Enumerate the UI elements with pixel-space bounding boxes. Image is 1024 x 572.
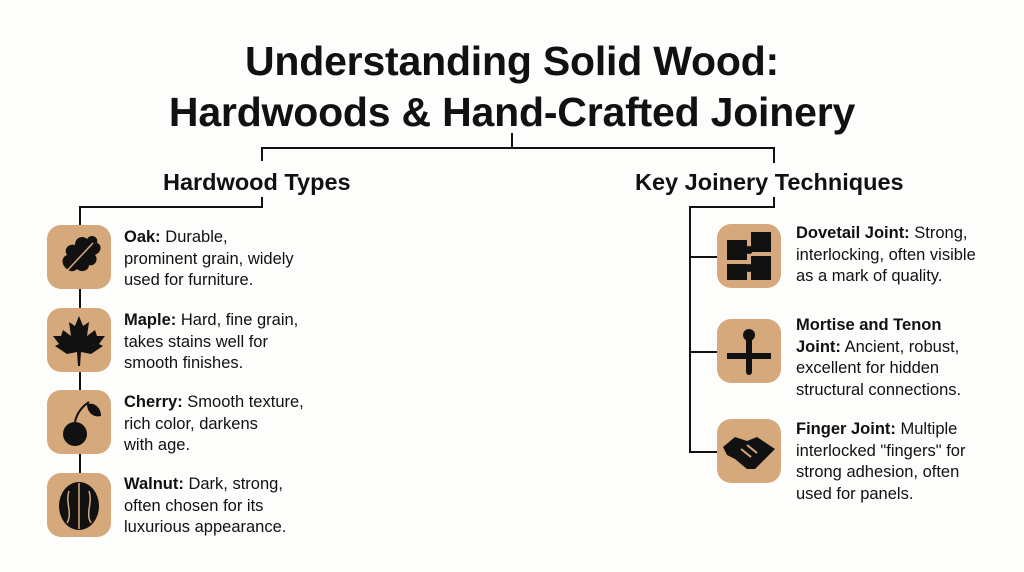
- panel: hardwood types: [47, 225, 304, 537]
- panel: joinery techniques: [717, 224, 976, 502]
- text: walnut: Walnut: Dark, strong,: [124, 475, 283, 493]
- text: oak: [124, 228, 294, 289]
- text: finger joint: strong adhesion, often: [796, 463, 959, 481]
- text: mortise and tenon: [796, 316, 961, 398]
- text: oak: prominent grain, widely: [124, 250, 294, 268]
- text: cherry: with age.: [124, 436, 190, 454]
- text: oak: used for furniture.: [124, 271, 253, 289]
- text: finger joint: Finger Joint: Multiple: [796, 420, 957, 438]
- text: mortise and tenon: structural connections.: [796, 380, 961, 398]
- text: walnut: often chosen for its: [124, 496, 263, 514]
- text: finger joint: [796, 420, 966, 502]
- text: maple: smooth finishes.: [124, 354, 243, 372]
- text: dovetail: [796, 224, 976, 285]
- title: [169, 38, 855, 135]
- icon: handshake: [717, 419, 781, 483]
- text: maple: [124, 311, 298, 372]
- text: mortise and tenon: Mortise and Tenon: [796, 316, 941, 334]
- text: cherry: [124, 393, 304, 454]
- icon: mortise and tenon: [717, 319, 781, 383]
- text: maple: takes stains well for: [124, 332, 268, 350]
- icon: puzzle: [717, 224, 781, 288]
- text: maple: Maple: Hard, fine grain,: [124, 311, 298, 329]
- title: Hardwoods & Hand-Crafted Joinery: [169, 89, 855, 135]
- text: dovetail: as a mark of quality.: [796, 267, 942, 285]
- text: oak: Oak: Durable,: [124, 228, 228, 246]
- text: mortise and tenon: excellent for hidden: [796, 359, 939, 377]
- icon: maple leaf: [47, 308, 111, 372]
- text: dovetail: Dovetail Joint: Strong,: [796, 224, 967, 242]
- text: finger joint: used for panels.: [796, 484, 913, 502]
- text: mortise and tenon: Joint: Ancient, robust,: [796, 338, 959, 356]
- title: Understanding Solid Wood:: [245, 38, 779, 84]
- text: walnut: luxurious appearance.: [124, 518, 286, 536]
- icon: cherry: [47, 390, 111, 454]
- text: cherry: Cherry: Smooth texture,: [124, 393, 304, 411]
- icon: walnut: [47, 473, 111, 537]
- text: cherry: rich color, darkens: [124, 414, 258, 432]
- heading: hardwood types: Hardwood Types: [163, 169, 351, 195]
- text: dovetail: interlocking, often visible: [796, 246, 976, 264]
- text: finger joint: interlocked "fingers" for: [796, 442, 965, 460]
- icon: oak leaf: [47, 225, 111, 289]
- text: walnut: [124, 475, 286, 536]
- heading: joinery: Key Joinery Techniques: [635, 169, 904, 195]
